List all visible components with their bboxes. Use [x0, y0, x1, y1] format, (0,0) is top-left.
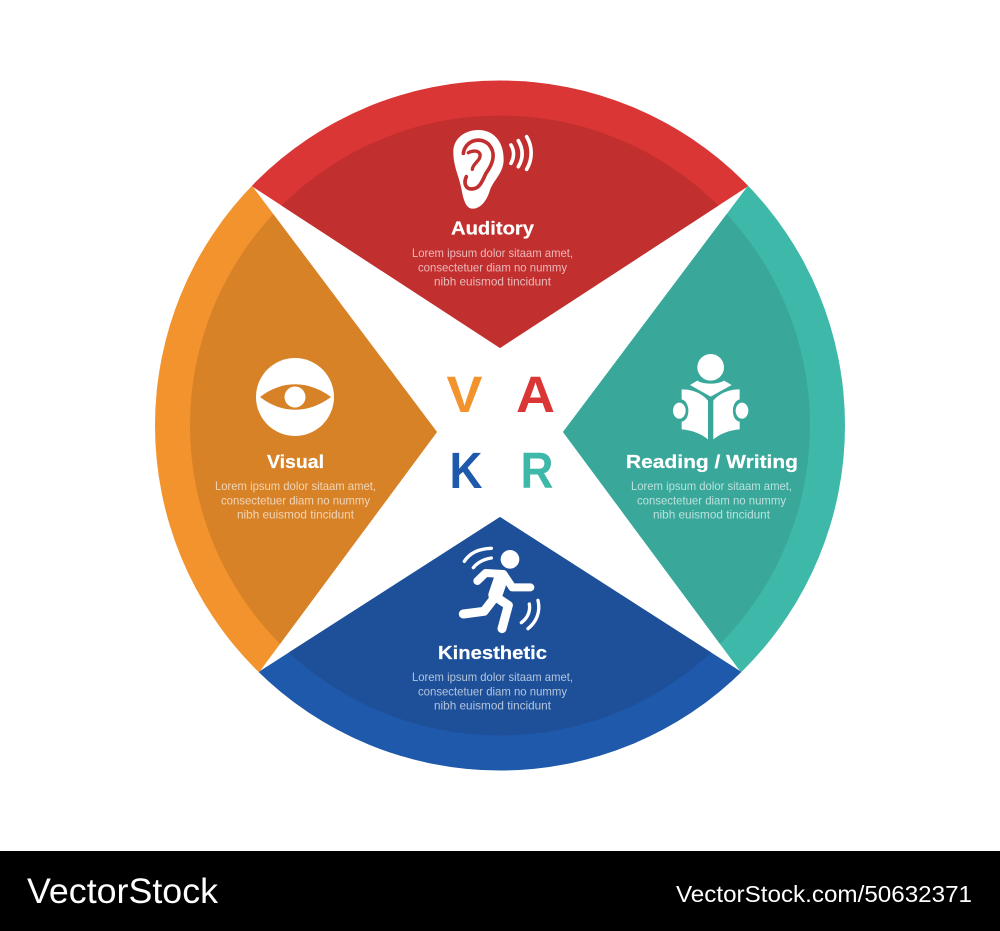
text block: kinesthetic description: Lorem ipsum dolor sitaam amet, [412, 671, 573, 684]
footer bar [0, 851, 1000, 931]
text block: auditory description: Lorem ipsum dolor sitaam amet, [412, 247, 573, 260]
footer url text: VectorStock.com/50632371 [676, 881, 972, 907]
letter V: V [446, 366, 482, 423]
text block: visual description: consectetuer diam no nummy [221, 494, 370, 507]
text block: auditory description: consectetuer diam no nummy [418, 261, 567, 274]
letter R: R [520, 442, 554, 499]
footer logo text: VectorStock [27, 872, 219, 911]
text block: reading description: nibh euismod tincidunt [653, 509, 771, 522]
panel: auditory [252, 80, 748, 348]
text block: kinesthetic description: consectetuer diam no nummy [418, 685, 567, 698]
heading: Kinesthetic: Kinesthetic [438, 642, 547, 663]
letter A: A [516, 366, 555, 423]
text block: reading description: Lorem ipsum dolor sitaam amet, [631, 480, 792, 493]
text block: visual description: nibh euismod tincidunt [237, 509, 355, 522]
heading: Reading / Writing: Reading / Writing [626, 451, 798, 472]
text block: auditory description: nibh euismod tincidunt [434, 276, 552, 289]
heading: Visual: Visual [267, 451, 324, 472]
panel: reading / writing [563, 186, 845, 672]
icon: running figure [463, 548, 539, 629]
panel: visual [155, 186, 437, 672]
panel: kinesthetic [258, 517, 742, 770]
text block: visual description: Lorem ipsum dolor sitaam amet, [215, 480, 376, 493]
letter K: K [450, 442, 483, 499]
icon: reader with book [673, 354, 748, 439]
text block: reading description: consectetuer diam no nummy [637, 494, 786, 507]
icon: eye [256, 358, 334, 436]
center letters: VARK [446, 366, 555, 499]
heading: Auditory: Auditory [451, 218, 535, 238]
text block: kinesthetic description: nibh euismod tincidunt [434, 700, 552, 713]
icon: ear [453, 130, 531, 209]
